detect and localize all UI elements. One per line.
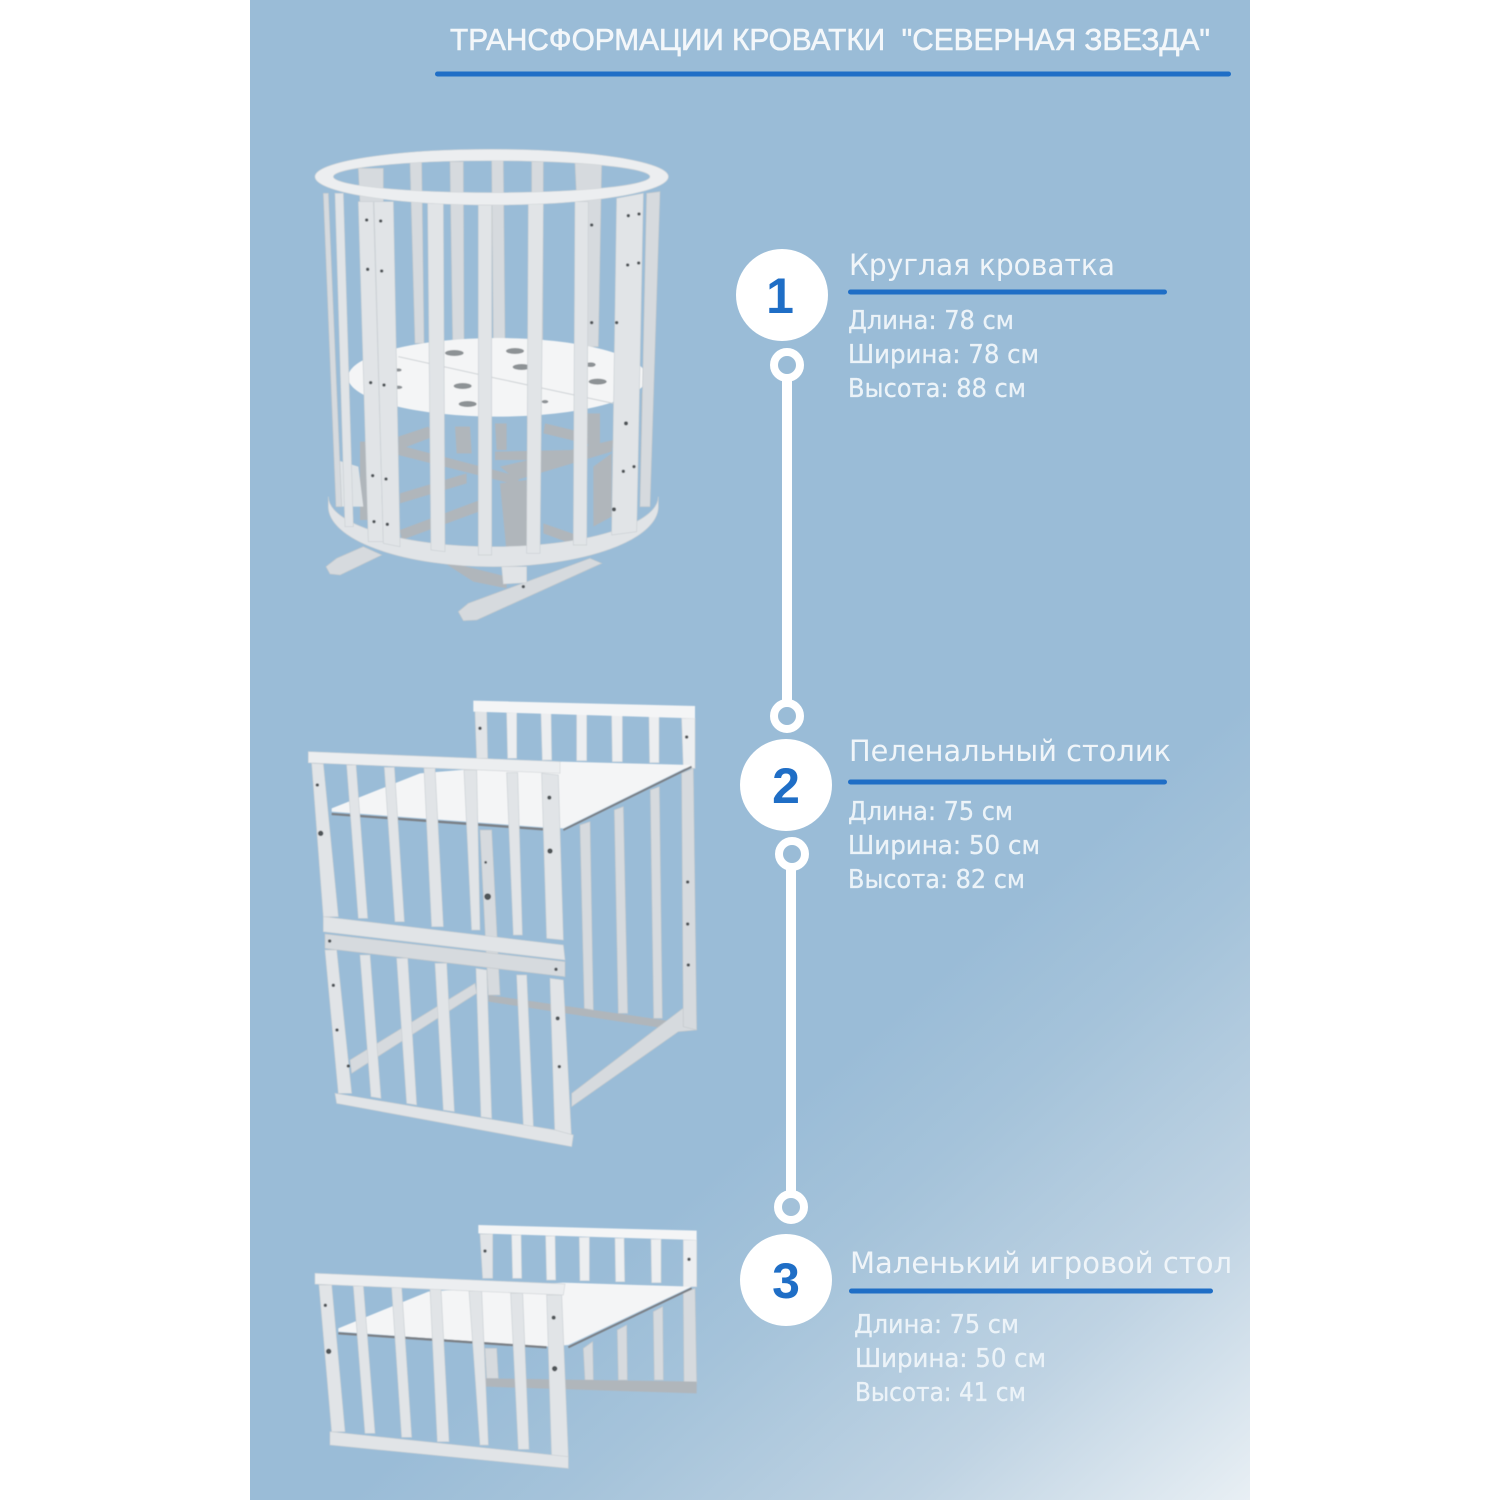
number 2: 2 <box>772 758 800 814</box>
mattress board <box>348 338 647 417</box>
bottom ring <box>328 497 658 567</box>
dimensions: Ширина: 78 см <box>848 340 1039 370</box>
middle bars <box>323 917 565 977</box>
lower right frame <box>485 1288 697 1393</box>
dimensions: Длина: 75 см <box>848 797 1013 827</box>
timeline connector 1 to 2 <box>774 352 800 729</box>
upper front panel <box>308 752 563 940</box>
rockers <box>326 547 602 621</box>
lower front panel <box>325 950 573 1147</box>
crib image: small play table <box>315 1225 697 1468</box>
dimensions <box>854 1310 1046 1408</box>
back rail <box>473 701 695 768</box>
heading: changing table: Пеленальный столик <box>849 734 1171 768</box>
table top <box>332 762 692 830</box>
front panel <box>315 1273 568 1468</box>
number 1: 1 <box>766 268 794 324</box>
screws <box>316 727 690 1068</box>
top ring <box>315 149 668 205</box>
heading: round crib: Круглая кроватка <box>849 248 1115 282</box>
panel: step 3 small play table <box>740 1234 1232 1408</box>
under-frame <box>337 390 650 553</box>
dimensions: Длина: 78 см <box>848 306 1014 336</box>
heading underline <box>849 1288 1213 1294</box>
dimensions: Длина: 75 см <box>854 1310 1019 1340</box>
heading: small play table: Маленький игровой стол <box>850 1246 1232 1280</box>
heading underline <box>848 290 1167 294</box>
title: ТРАНСФОРМАЦИИ КРОВАТКИ "СЕВЕРНАЯ ЗВЕЗДА" <box>450 22 1210 57</box>
table top <box>338 1283 692 1347</box>
back rail <box>478 1225 697 1287</box>
right side slats <box>580 768 697 1030</box>
dimensions: Высота: 82 см <box>848 865 1025 895</box>
number 3: 3 <box>772 1253 800 1309</box>
dimensions: Ширина: 50 см <box>855 1344 1046 1374</box>
dimensions <box>848 797 1040 895</box>
title underline <box>435 72 1231 76</box>
bolts <box>365 212 641 588</box>
front slats <box>323 192 660 555</box>
dimensions: Высота: 88 см <box>848 374 1026 404</box>
crib image: round crib <box>315 149 668 621</box>
panel: step 1 round crib <box>736 248 1167 404</box>
background panel <box>250 0 1250 1500</box>
panel: step 2 changing table <box>740 734 1171 895</box>
heading underline <box>848 780 1167 784</box>
dimensions: Высота: 41 см <box>855 1378 1026 1408</box>
screws <box>324 1249 691 1371</box>
dimensions <box>848 306 1039 404</box>
crib image: changing table <box>308 701 697 1147</box>
dimensions: Ширина: 50 см <box>848 831 1040 861</box>
timeline connector 2 to 3 <box>778 841 805 1220</box>
